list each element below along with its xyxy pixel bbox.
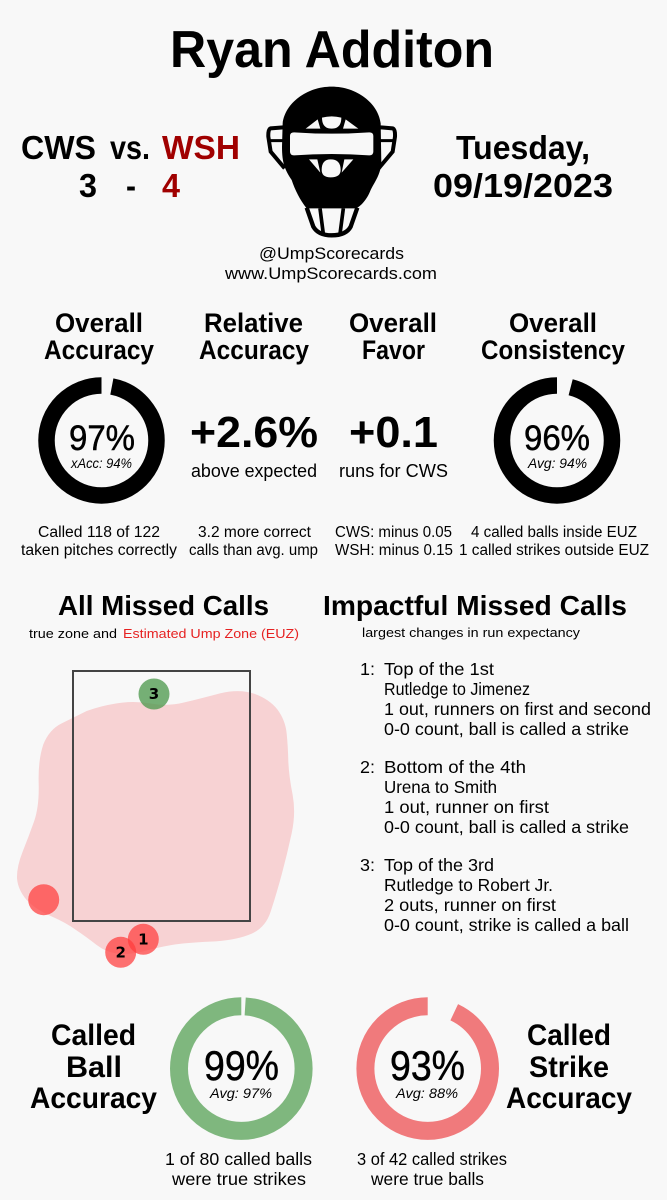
donut: 97 percent accuracy: 97% bbox=[69, 419, 135, 458]
note: EUZ calls: 1 called strikes outside EUZ bbox=[459, 542, 649, 559]
note: called balls: 1 of 80 called balls bbox=[165, 1149, 312, 1169]
heading: overall favor bbox=[349, 308, 437, 365]
social handles: @UmpScorecards bbox=[259, 244, 404, 263]
heading: called strike accuracy: Accuracy bbox=[506, 1082, 632, 1115]
note: more correct calls: calls than avg. ump bbox=[189, 542, 318, 559]
stat: plus 2.6 percent: +2.6% bbox=[190, 408, 318, 457]
heading: impactful missed calls: Impactful Missed Calls bbox=[323, 590, 627, 621]
missed call 3 bbox=[138, 678, 170, 710]
heading: overall consistency bbox=[481, 308, 625, 365]
matchup and score: - bbox=[126, 167, 136, 204]
matchup and score: WSH bbox=[162, 129, 240, 166]
missed call entry 2: 2: bbox=[360, 757, 375, 777]
donut: 96 percent consistency: 96% bbox=[524, 419, 590, 458]
heading: overall consistency: Consistency bbox=[481, 335, 625, 365]
panel: relative accuracy bbox=[189, 308, 318, 559]
subheading: zone legend bbox=[29, 626, 299, 641]
missed call entry 1: 1 out, runners on first and second bbox=[384, 699, 651, 719]
matchup and score: 3 bbox=[79, 167, 97, 204]
heading: overall consistency: Overall bbox=[509, 308, 597, 338]
missed call entry 1: 1: bbox=[360, 659, 375, 679]
heading: called strike accuracy bbox=[506, 1019, 632, 1115]
missed call entry 2 bbox=[360, 757, 629, 837]
note: called correctly: taken pitches correctly bbox=[21, 542, 177, 559]
note: called correctly bbox=[21, 524, 177, 559]
heading: relative accuracy: Relative bbox=[204, 308, 303, 338]
note: called balls bbox=[165, 1149, 312, 1189]
stat: plus 0.1: +0.1 bbox=[349, 408, 438, 457]
game date bbox=[433, 129, 613, 204]
missed call entry 2: Bottom of the 4th bbox=[384, 757, 526, 777]
game date: 09/19/2023 bbox=[433, 167, 613, 204]
donut: 93 percent called strikes: Avg: 88% bbox=[395, 1085, 458, 1101]
missed call 3: 3 bbox=[149, 685, 159, 703]
donut: 96 percent consistency: Avg: 94% bbox=[527, 455, 587, 471]
note: EUZ calls: 4 called balls inside EUZ bbox=[471, 524, 637, 541]
panel: overall favor bbox=[335, 308, 453, 559]
missed call 1 bbox=[128, 924, 159, 955]
subheading: zone legend: true zone and bbox=[29, 626, 117, 641]
missed call entry 3: 2 outs, runner on first bbox=[384, 895, 556, 915]
missed call: unlabelled bbox=[28, 884, 59, 915]
donut: 99 percent called balls bbox=[179, 1006, 304, 1131]
heading: called ball accuracy: Ball bbox=[66, 1051, 122, 1084]
panel: called ball accuracy bbox=[30, 1006, 312, 1189]
panel: all missed calls bbox=[17, 590, 299, 968]
panel: called strike accuracy bbox=[357, 1006, 632, 1189]
missed call entry 3: 0-0 count, strike is called a ball bbox=[384, 915, 629, 935]
matchup and score: vs. bbox=[110, 129, 150, 166]
donut: 99 percent called balls: 99% bbox=[204, 1042, 279, 1089]
donut: 97 percent accuracy bbox=[46, 386, 156, 496]
missed call entry 3: Rutledge to Robert Jr. bbox=[384, 875, 553, 895]
note: called strikes bbox=[357, 1149, 507, 1189]
subheading: run expectancy: largest changes in run expectancy bbox=[362, 625, 581, 640]
missed call entry 2: Urena to Smith bbox=[384, 777, 497, 797]
note: more correct calls: 3.2 more correct bbox=[198, 524, 312, 541]
icon: umpire mask bbox=[268, 87, 395, 235]
note: called correctly: Called 118 of 122 bbox=[38, 524, 160, 541]
heading: called ball accuracy bbox=[30, 1019, 157, 1115]
note: team run impact bbox=[335, 524, 453, 559]
matchup and score: CWS bbox=[21, 129, 96, 166]
note: team run impact: CWS: minus 0.05 bbox=[335, 524, 452, 541]
social handles bbox=[224, 244, 437, 283]
panel: impactful missed calls bbox=[323, 590, 651, 935]
note: more correct calls bbox=[189, 524, 318, 559]
game date: Tuesday, bbox=[456, 129, 590, 166]
title: Ryan Additon bbox=[170, 21, 494, 79]
missed call entry 3: Top of the 3rd bbox=[384, 855, 494, 875]
missed call entry 1: Rutledge to Jimenez bbox=[384, 679, 530, 699]
heading: relative accuracy bbox=[199, 308, 309, 365]
social handles: www.UmpScorecards.com bbox=[224, 264, 437, 283]
true strike zone bbox=[73, 671, 250, 921]
subheading: zone legend: Estimated Ump Zone (EUZ) bbox=[123, 626, 299, 641]
heading: all missed calls: All Missed Calls bbox=[58, 590, 269, 621]
chart: strike zone plot bbox=[17, 671, 294, 968]
note: called strikes: were true balls bbox=[370, 1169, 484, 1189]
heading: overall favor: Favor bbox=[362, 335, 425, 365]
panel: overall accuracy bbox=[21, 308, 177, 559]
missed call entry 1: 0-0 count, ball is called a strike bbox=[384, 719, 629, 739]
donut: 99 percent called balls: Avg: 97% bbox=[209, 1085, 272, 1101]
heading: called strike accuracy: Called bbox=[527, 1019, 611, 1052]
stat caption: above expected: above expected bbox=[191, 461, 317, 481]
heading: overall favor: Overall bbox=[349, 308, 437, 338]
missed call 2 bbox=[105, 937, 136, 968]
heading: relative accuracy: Accuracy bbox=[199, 335, 309, 365]
heading: overall accuracy: Accuracy bbox=[44, 335, 154, 365]
donut: 96 percent consistency bbox=[502, 386, 612, 496]
donut: 93 percent called strikes: 93% bbox=[390, 1042, 465, 1089]
missed call entry 2: 1 out, runner on first bbox=[384, 797, 549, 817]
heading: called ball accuracy: Accuracy bbox=[30, 1082, 157, 1115]
donut: 97 percent accuracy: xAcc: 94% bbox=[70, 455, 132, 471]
missed call entry 3: 3: bbox=[360, 855, 375, 875]
heading: called strike accuracy: Strike bbox=[529, 1051, 609, 1084]
missed call 2: 2 bbox=[115, 944, 126, 962]
missed call entry 3 bbox=[360, 855, 629, 935]
panel: overall consistency bbox=[459, 308, 649, 559]
estimated ump zone bbox=[17, 691, 294, 954]
heading: called ball accuracy: Called bbox=[51, 1019, 136, 1052]
note: called strikes: 3 of 42 called strikes bbox=[357, 1149, 507, 1169]
matchup and score bbox=[21, 129, 240, 204]
missed call entry 1: Top of the 1st bbox=[384, 659, 494, 679]
note: called balls: were true strikes bbox=[171, 1169, 306, 1189]
heading: overall accuracy: Overall bbox=[55, 308, 143, 338]
missed call entry 1 bbox=[360, 659, 651, 739]
note: EUZ calls bbox=[459, 524, 649, 559]
heading: overall accuracy bbox=[44, 308, 154, 365]
note: team run impact: WSH: minus 0.15 bbox=[335, 542, 453, 559]
matchup and score: 4 bbox=[162, 167, 181, 204]
donut: 93 percent called strikes bbox=[365, 1006, 490, 1131]
stat caption: runs for CWS: runs for CWS bbox=[339, 461, 448, 481]
missed call 1: 1 bbox=[138, 930, 149, 948]
missed call entry 2: 0-0 count, ball is called a strike bbox=[384, 817, 629, 837]
